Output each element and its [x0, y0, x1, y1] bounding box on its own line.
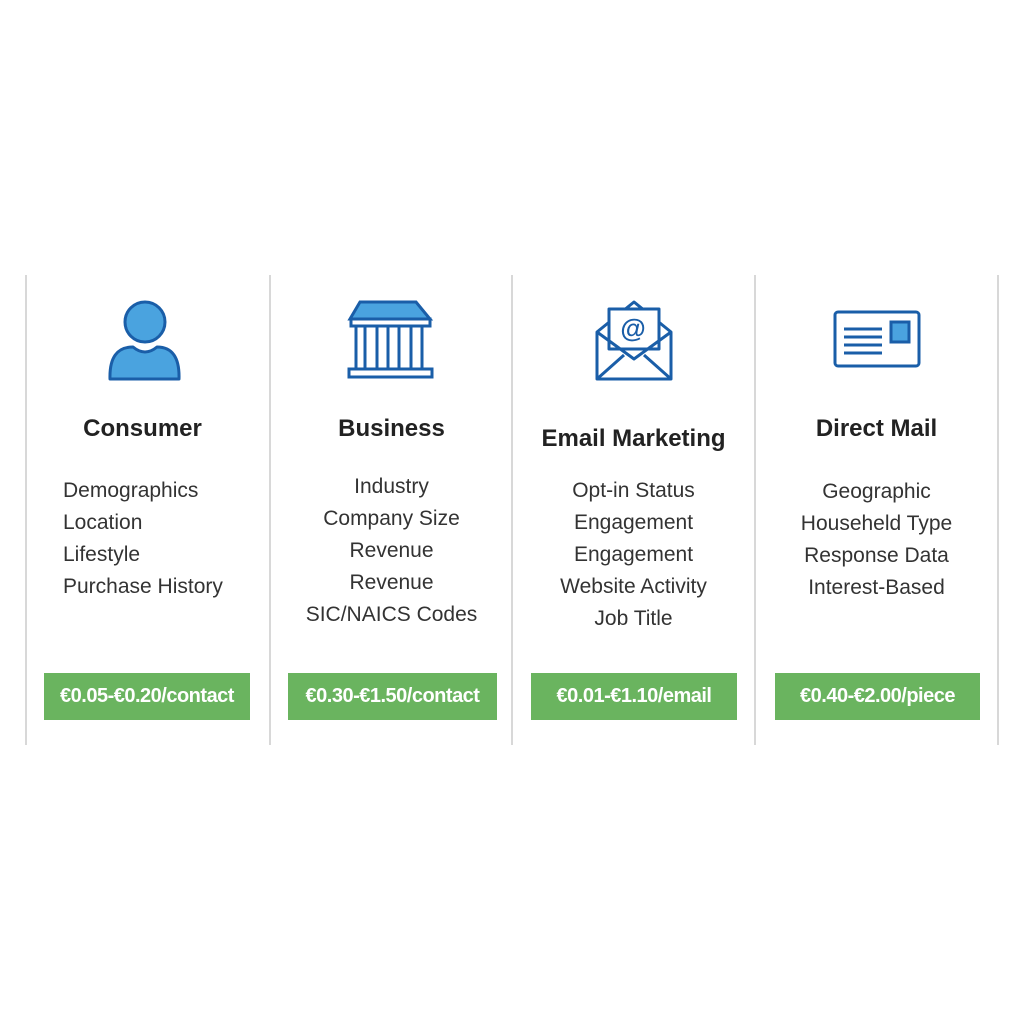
list: Industry [354, 475, 429, 498]
icon: building [347, 300, 434, 378]
heading: Business [338, 415, 445, 442]
icon: envelope: @ [620, 313, 646, 343]
icon: person [108, 300, 181, 380]
panel: email [531, 300, 737, 720]
price: €0.40-€2.00/piece [800, 685, 955, 707]
list: Househeld Type [801, 512, 952, 535]
icon: postcard [834, 310, 920, 368]
price [288, 673, 497, 720]
price: €0.30-€1.50/contact [306, 685, 479, 707]
panel: business [288, 300, 497, 720]
heading: Direct Mail [816, 415, 937, 442]
list: Engagement [574, 511, 693, 534]
list: Opt-in Status [572, 479, 695, 502]
list: Company Size [323, 507, 460, 530]
list: Interest-Based [808, 576, 945, 599]
list: Lifestyle [63, 543, 140, 566]
list: Purchase History [63, 575, 223, 598]
list: Engagement [574, 543, 693, 566]
list [306, 475, 477, 626]
price: €0.05-€0.20/contact [60, 685, 234, 707]
list: Demographics [63, 479, 198, 502]
list: Response Data [804, 544, 949, 567]
list: SIC/NAICS Codes [306, 603, 477, 626]
panel: direct mail [775, 310, 980, 720]
price [775, 673, 980, 720]
heading: Consumer [83, 415, 202, 442]
price [531, 673, 737, 720]
list: Geographic [822, 480, 931, 503]
heading: Email Marketing [541, 425, 726, 452]
list: Website Activity [560, 575, 707, 598]
price [44, 673, 250, 720]
list [560, 479, 707, 630]
panel: consumer [44, 300, 250, 720]
list [63, 479, 223, 598]
list [801, 480, 952, 599]
price: €0.01-€1.10/email [557, 685, 711, 707]
list: Job Title [594, 607, 673, 630]
icon: envelope [596, 300, 672, 380]
list: Revenue [349, 571, 434, 594]
list: Revenue [349, 539, 434, 562]
list: Location [63, 511, 142, 534]
